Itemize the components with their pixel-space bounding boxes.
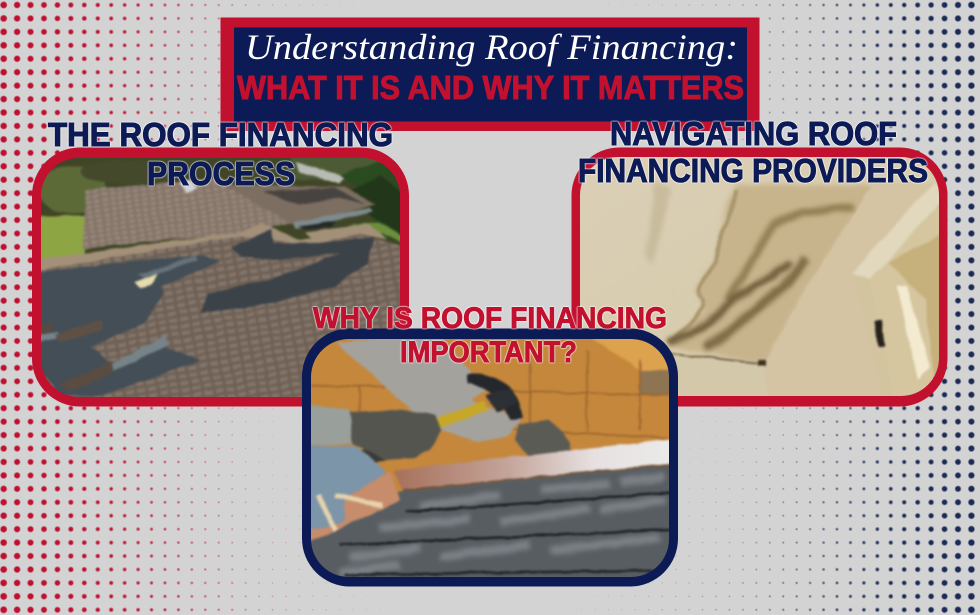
heading: why is roof financing important: IMPORTANT?: [400, 336, 577, 369]
heading: navigating roof financing providers: [578, 115, 928, 189]
upper roof: [83, 178, 300, 248]
drip mark: [645, 180, 672, 265]
title line 2: WHAT IT IS AND WHY IT MATTERS: [237, 69, 744, 106]
handle: [436, 405, 487, 424]
heading: navigating roof financing providers: NAVIGATING ROOF: [610, 115, 897, 152]
lower left wall: [668, 353, 768, 400]
heading: the roof financing process: THE ROOF FINANCING: [48, 116, 393, 153]
heading: the roof financing process: [48, 116, 393, 192]
ridge: [30, 224, 388, 272]
right glove: [514, 418, 572, 458]
heading: why is roof financing important: WHY IS ROOF FINANCING: [313, 302, 667, 335]
exposed slate left: [30, 255, 221, 396]
tool belt: [310, 470, 400, 542]
jeans: [311, 444, 386, 531]
left glove: [350, 410, 442, 460]
heading: navigating roof financing providers: FINANCING PROVIDERS: [578, 152, 928, 189]
title banner: [220, 18, 760, 131]
heading: the roof financing process: PROCESS: [147, 155, 295, 192]
stain body: [665, 185, 875, 365]
metal strip: [393, 438, 680, 490]
photo panel: damaged roof: [30, 148, 410, 406]
photo panel: roofer with hammer: [300, 328, 680, 586]
right wall: [768, 183, 930, 396]
sleeve: [337, 330, 523, 442]
hammer head: [467, 374, 523, 420]
left arm: [311, 404, 353, 447]
heading: why is roof financing important: [313, 302, 667, 369]
lower roof: [30, 234, 410, 400]
title line 1: Understanding Roof Financing:: [245, 27, 738, 67]
torn patches: [110, 335, 168, 372]
shingles: [300, 465, 680, 580]
door frame: [853, 184, 939, 279]
exposed slate band: [201, 230, 374, 313]
photo panel: water-stained ceiling: [570, 148, 950, 406]
